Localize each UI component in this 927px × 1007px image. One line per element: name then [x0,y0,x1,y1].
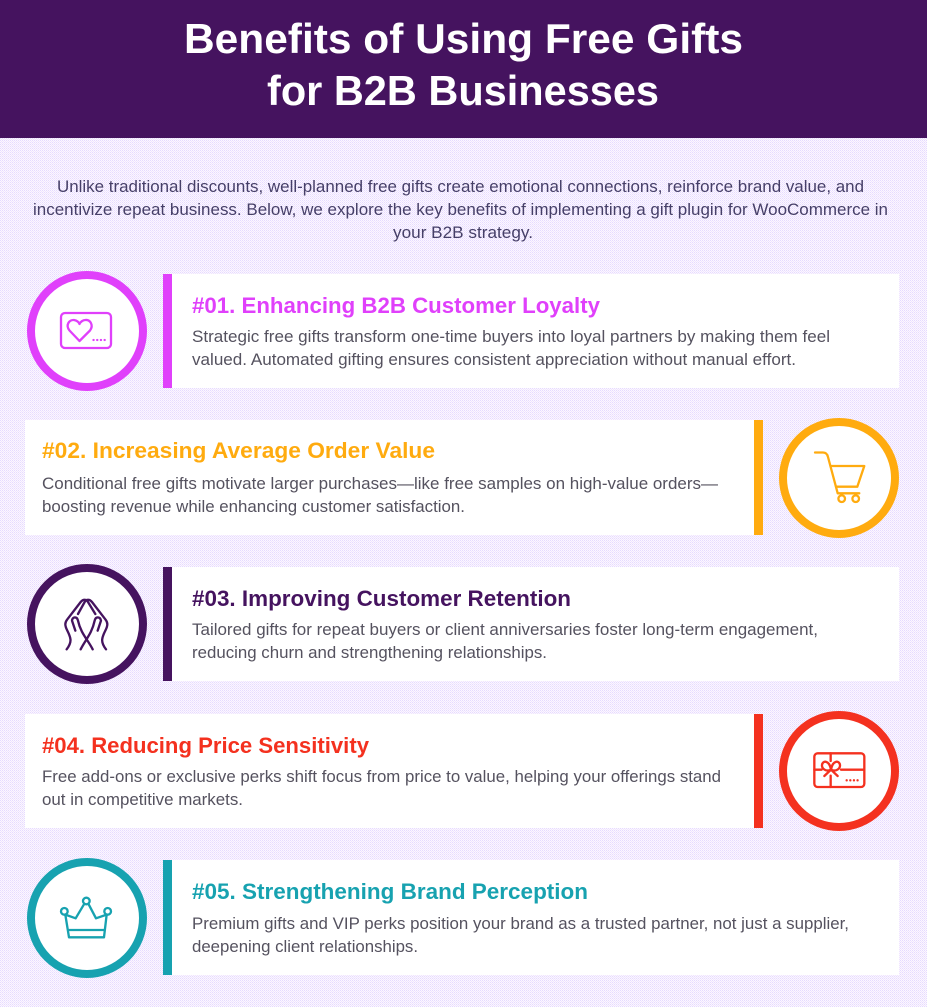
icon: heart card in ring [31,275,143,387]
title [184,15,743,114]
description: boosting revenue while enhancing customer satisfaction. [42,498,465,516]
description [42,768,721,809]
card [163,274,899,388]
heading: #04. Reducing Price Sensitivity [42,733,369,758]
card [25,714,763,828]
panel: benefit 02 average order value [25,420,895,535]
intro paragraph: incentivize repeat business. Below, we explore the key benefits of implementing a gift plugin for WooCommerce in [33,201,888,219]
accent bar [163,274,172,388]
title: for B2B Businesses [267,67,659,114]
card [25,420,763,535]
icon: shopping cart in ring [783,422,895,534]
intro paragraph: your B2B strategy. [393,224,533,242]
description [42,475,719,516]
panel: benefit 01 customer loyalty [31,274,899,388]
panel: benefit 04 price sensitivity [25,714,895,828]
title: Benefits of Using Free Gifts [184,15,743,62]
icon: gift card in ring [783,715,895,827]
description: deepening client relationships. [192,938,418,956]
intro paragraph: Unlike traditional discounts, well-planned free gifts create emotional connections, reinforce brand value, and [57,178,864,196]
description: Tailored gifts for repeat buyers or client anniversaries foster long-term engagement, [192,621,818,639]
accent bar [754,420,763,535]
intro paragraph [33,178,888,242]
panel: benefit 03 customer retention [31,567,899,681]
description: Strategic free gifts transform one-time buyers into loyal partners by making them feel [192,328,830,346]
accent bar [163,567,172,681]
heading: #02. Increasing Average Order Value [42,438,435,463]
icon: crown in ring [31,862,143,974]
description [192,621,818,662]
accent bar [754,714,763,828]
heading: #01. Enhancing B2B Customer Loyalty [192,293,600,318]
icon: open hands in ring [31,568,143,680]
description [192,915,849,956]
description: reducing churn and strengthening relationships. [192,644,547,662]
heading: #05. Strengthening Brand Perception [192,879,588,904]
panel: benefit 05 brand perception [31,860,899,975]
description: Free add-ons or exclusive perks shift focus from price to value, helping your offerings stand [42,768,721,786]
card [163,567,899,681]
header banner [0,0,927,138]
accent bar [163,860,172,975]
description: Premium gifts and VIP perks position your brand as a trusted partner, not just a supplier, [192,915,849,933]
description [192,328,830,369]
description: out in competitive markets. [42,791,243,809]
description: Conditional free gifts motivate larger purchases—like free samples on high-value orders— [42,475,719,493]
heading: #03. Improving Customer Retention [192,586,571,611]
card [163,860,899,975]
description: valued. Automated gifting ensures consistent appreciation without manual effort. [192,351,796,369]
